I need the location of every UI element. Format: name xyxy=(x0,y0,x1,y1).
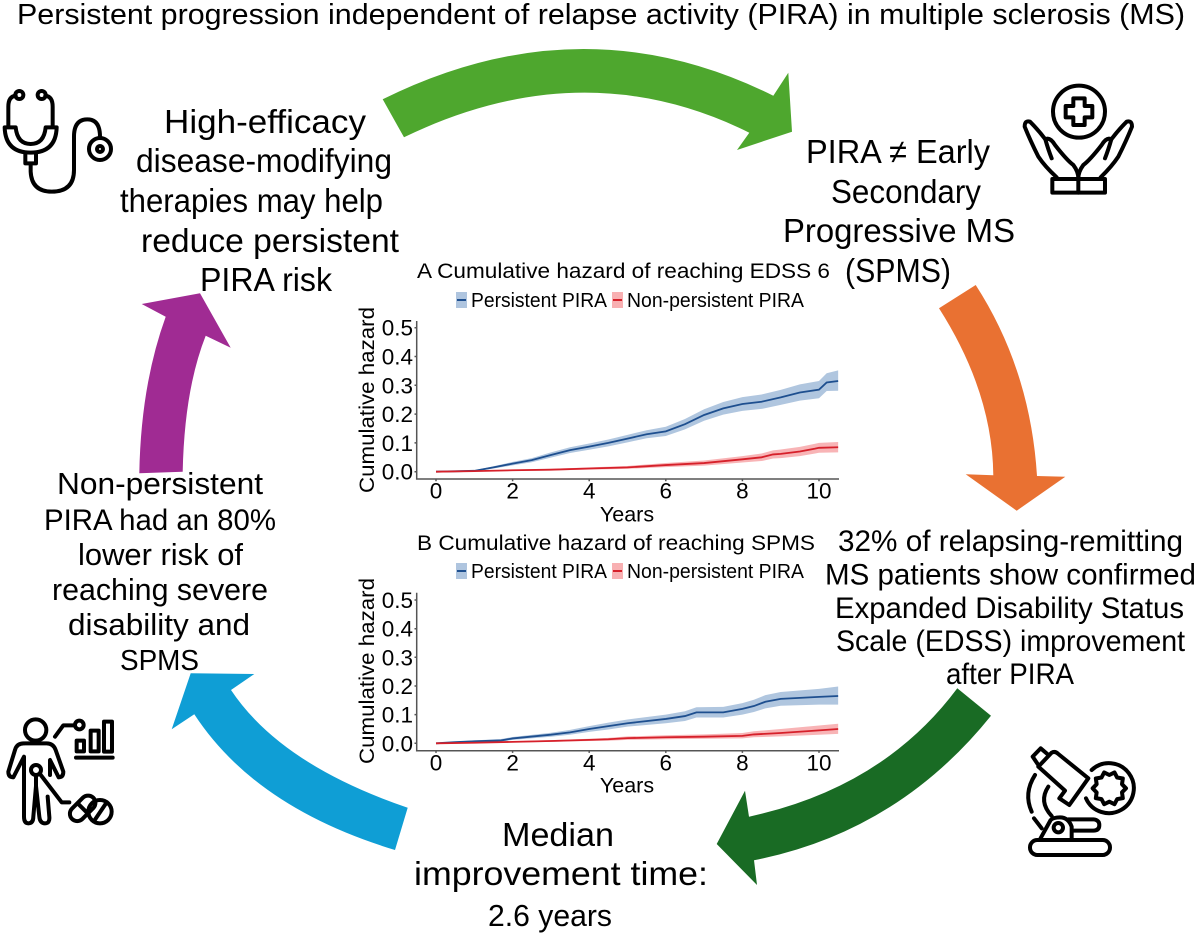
arrow: blue, median time to non-persistent PIRA xyxy=(172,673,408,850)
chart B x tick labels: 6 xyxy=(660,750,672,776)
text block: high-efficacy therapies: reduce persistent xyxy=(141,223,400,260)
chart A y tick labels: 0.1 xyxy=(382,431,413,456)
chart B y axis label: Cumulative hazard xyxy=(355,578,379,764)
text block: PIRA is not early SPMS xyxy=(783,134,1015,290)
text block: PIRA is not early SPMS: PIRA ≠ Early xyxy=(806,134,990,171)
icon: patient with chart and pills xyxy=(8,719,113,824)
text block: non-persistent PIRA lower risk: SPMS xyxy=(120,645,199,677)
text block: median improvement time: 2.6 years xyxy=(488,898,612,933)
chart A y tick labels xyxy=(382,316,413,485)
chart B y tick labels: 0.5 xyxy=(382,588,413,613)
chart A title: A Cumulative hazard of reaching EDSS 6 xyxy=(417,259,830,283)
text block: non-persistent PIRA lower risk: disability and xyxy=(68,608,250,642)
text block: non-persistent PIRA lower risk: Non-persistent xyxy=(57,467,264,501)
chart B x axis label: Years xyxy=(600,774,654,798)
text block: PIRA is not early SPMS: Progressive MS xyxy=(783,213,1015,250)
chart A x tick labels: 10 xyxy=(806,478,832,504)
chart B x tick labels: 10 xyxy=(806,750,832,776)
chart A y axis label: Cumulative hazard xyxy=(355,307,379,493)
chart B y tick labels: 0.2 xyxy=(382,674,413,699)
chart B x tick labels: 4 xyxy=(583,750,595,776)
text block: high-efficacy therapies xyxy=(120,104,400,299)
arrow: green, therapies to PIRA xyxy=(383,49,792,150)
icon: microscope with microbe xyxy=(1028,748,1134,855)
text block: high-efficacy therapies: PIRA risk xyxy=(200,262,332,299)
text block: PIRA is not early SPMS: (SPMS) xyxy=(845,253,951,290)
text block: median improvement time xyxy=(414,817,708,933)
text block: non-persistent PIRA lower risk: PIRA had an 80% xyxy=(44,504,276,537)
text block: median improvement time: improvement time: xyxy=(414,856,708,893)
text block: 32 percent EDSS improvement: Expanded Disability Status xyxy=(835,592,1184,625)
text block: non-persistent PIRA lower risk xyxy=(44,467,276,677)
text block: PIRA is not early SPMS: Secondary xyxy=(831,174,981,211)
text block: high-efficacy therapies: High-efficacy xyxy=(164,104,366,141)
icon: hands holding medical cross xyxy=(1025,86,1132,193)
text block: high-efficacy therapies: disease-modifying xyxy=(136,143,392,180)
text block: median improvement time: Median xyxy=(502,817,614,854)
chart A x tick labels xyxy=(430,478,832,504)
chart A x tick labels: 8 xyxy=(736,478,749,504)
text block: 32 percent EDSS improvement xyxy=(825,525,1196,691)
arrow: purple, non-persistent PIRA to therapies xyxy=(139,293,231,473)
chart B x tick labels: 0 xyxy=(430,750,442,776)
chart B axes xyxy=(414,593,839,753)
chart A legend: Non-persistent PIRA xyxy=(627,290,805,312)
chart B legend: Persistent PIRA xyxy=(471,561,608,583)
text block: high-efficacy therapies: therapies may help xyxy=(120,183,383,220)
chart A x tick labels: 0 xyxy=(430,478,442,504)
chart B y tick labels xyxy=(382,588,413,756)
chart B y tick labels: 0.4 xyxy=(382,617,413,642)
text block: 32 percent EDSS improvement: after PIRA xyxy=(946,658,1074,691)
text block: non-persistent PIRA lower risk: reaching severe xyxy=(52,573,268,607)
text block: 32 percent EDSS improvement: Scale (EDSS) improvement xyxy=(836,625,1185,658)
chart A y tick labels: 0.0 xyxy=(382,460,413,485)
text block: 32 percent EDSS improvement: 32% of relapsing-remitting xyxy=(838,525,1183,558)
chart A curves xyxy=(436,370,838,472)
chart A: cumulative hazard of reaching EDSS 6 xyxy=(355,259,839,526)
chart A y tick labels: 0.4 xyxy=(382,344,413,370)
chart A y tick labels: 0.3 xyxy=(382,373,413,398)
chart B legend xyxy=(456,561,805,583)
chart B x tick labels: 8 xyxy=(736,750,749,776)
chart A y tick labels: 0.2 xyxy=(382,402,413,427)
chart B title: B Cumulative hazard of reaching SPMS xyxy=(417,531,815,555)
chart B y tick labels: 0.1 xyxy=(382,703,413,728)
chart B y tick labels: 0.0 xyxy=(382,731,413,756)
arrow: orange, SPMS to EDSS improvement xyxy=(939,285,1065,511)
icon: stethoscope xyxy=(5,91,111,192)
arrow: dark green, EDSS improvement to median time xyxy=(717,688,991,885)
chart B y tick labels: 0.3 xyxy=(382,645,413,670)
chart B x tick labels xyxy=(430,750,832,776)
chart A y tick labels: 0.5 xyxy=(382,316,413,341)
chart A legend: Persistent PIRA xyxy=(471,290,608,312)
text block: 32 percent EDSS improvement: MS patients show confirmed xyxy=(825,558,1196,592)
chart A x tick labels: 4 xyxy=(583,478,595,504)
chart B: cumulative hazard of reaching SPMS xyxy=(355,531,839,798)
chart A x axis label: Years xyxy=(600,502,654,526)
chart A axes xyxy=(414,321,839,481)
chart B curves xyxy=(436,687,838,743)
chart B x tick labels: 2 xyxy=(506,750,519,776)
text block: non-persistent PIRA lower risk: lower risk of xyxy=(78,538,244,572)
chart A x tick labels: 2 xyxy=(506,478,519,504)
chart A x tick labels: 6 xyxy=(660,478,672,504)
chart A legend xyxy=(456,290,805,312)
chart B legend: Non-persistent PIRA xyxy=(627,561,805,583)
